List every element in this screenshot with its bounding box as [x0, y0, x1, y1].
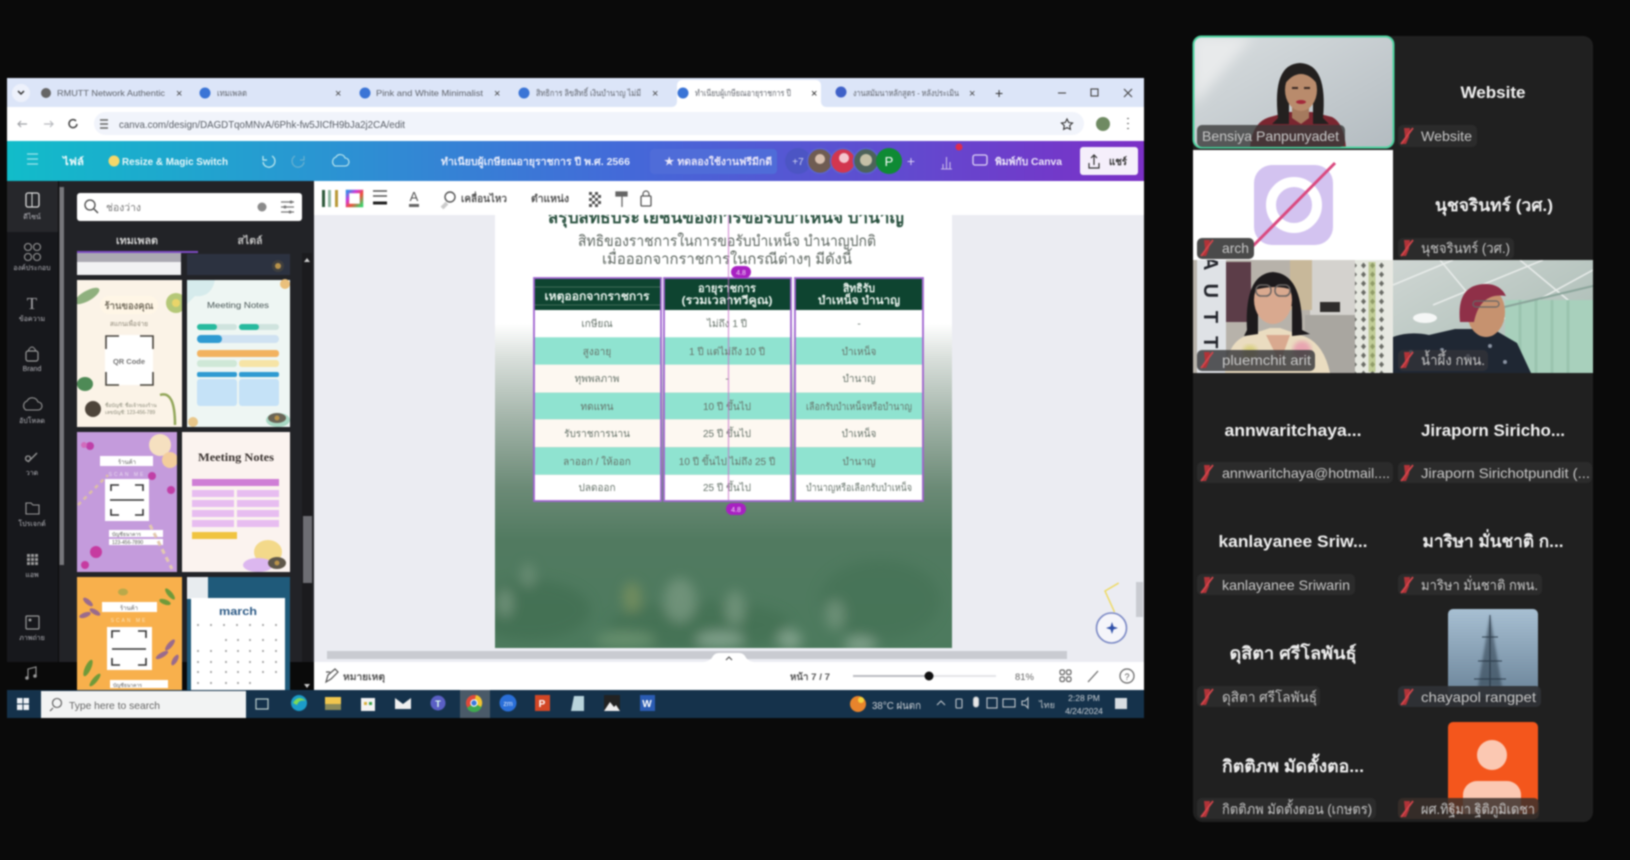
table column 3: เลือกรับบำเหน็จหรือบำนาญ: [806, 399, 912, 413]
trial button: ★ ทดลองใช้งานฟรีมีกดี: [664, 155, 772, 168]
template: QR code cream: ชื่อบัญชี: ชื่อเจ้าของร้าน: [105, 402, 157, 409]
table column 1: ทดแทน: [581, 402, 614, 413]
participant: arch: arch: [1222, 240, 1249, 256]
participant: กิตติภพ: กิตติภพ มัดตั้งตอน (เกษตร): [1222, 799, 1372, 817]
participant: น้ำผึ้ง กพน.: น้ำผึ้ง กพน.: [1421, 350, 1485, 368]
canva contextual toolbar: ตำแหน่ง: [531, 193, 569, 205]
canva icon rail: อัปโหลด: [19, 416, 45, 425]
spacing badge bottom: [726, 503, 746, 515]
template: meeting notes teal: Meeting Notes: [207, 301, 269, 310]
page heading: สรุปสิทธิประโยชน์ของการขอรับบำเหน็จ บำนาญ: [548, 205, 904, 228]
collaborators: +7: [792, 157, 804, 168]
canva contextual toolbar: เคลื่อนไหว: [461, 191, 507, 205]
table column 1: รับราชการนาน: [564, 429, 630, 440]
hair: [1272, 63, 1329, 124]
system tray: [937, 697, 1028, 708]
taskbar search: Type here to search: [69, 700, 160, 712]
table column 3: บำนาญ: [843, 457, 875, 468]
spacing badge top: 4.8: [736, 270, 746, 277]
windows taskbar: [7, 690, 1144, 718]
clock: 4/24/2024: [1065, 706, 1103, 716]
window controls: [1058, 89, 1132, 97]
taskbar weather: 38°C ฝนตก: [872, 701, 921, 712]
template: purple scan me: บัญชีธนาคาร: [112, 531, 141, 538]
template: purple scan me: [77, 432, 178, 572]
participant: kanlayanee: kanlayanee Sriwarin: [1222, 577, 1350, 593]
canva icon rail: Brand: [23, 366, 41, 373]
table column 2: 1 ปี แต่ไม่ถึง 10 ปี: [689, 346, 765, 358]
participant: นุชจรินทร์: นุชจรินทร์ (วศ.): [1421, 240, 1510, 257]
taskbar app icons: zm: [503, 701, 513, 708]
participant: ผศ.ทิฐิมา: ผศ.ทิฐิมา ฐิติภูมิเดชา: [1421, 801, 1535, 818]
spacing badge bottom: 4.8: [731, 507, 741, 514]
lattice: [1355, 260, 1393, 373]
participant: Website: Website: [1460, 83, 1526, 102]
template: QR code cream: เลขบัญชี: 123-456-789: [105, 409, 155, 416]
table column 1: [534, 278, 661, 501]
participant: arch: [1193, 150, 1393, 260]
table column 3: สิทธิรับ: [843, 282, 875, 295]
browser tab strip: สิทธิการ ลิขสิทธิ์ เงินบำนาญ ไม่มี: [536, 87, 641, 98]
address bar: [7, 107, 1144, 141]
canva bottom bar: หมายเหตุ: [343, 672, 385, 683]
canva contextual toolbar: A: [410, 189, 419, 204]
canvas area: [314, 215, 1144, 662]
table column 3: บำเหน็จ: [842, 344, 876, 358]
selection outlines: [534, 278, 923, 501]
active tab: ทำเนียบผู้เกษียณอายุราชการ ปี: [695, 88, 791, 99]
page subheading: สิทธิของราชการในการขอรับบำเหน็จ บำนาญปกติ: [578, 231, 876, 250]
participant: pluemchit arit: pluemchit arit: [1222, 352, 1311, 368]
browser tab strip: ×: [494, 88, 500, 100]
spacing badge top: [731, 266, 751, 278]
canva icon rail: ภาพถ่าย: [19, 635, 45, 642]
taskbar weather: [850, 696, 921, 712]
template: QR code cream: สแกนเพื่อจ่าย: [110, 319, 148, 328]
template: orange scan me: [77, 577, 182, 690]
participant: Jiraporn: Jiraporn Siricho...: [1421, 421, 1565, 440]
participant: Jiraporn: [1398, 421, 1592, 483]
participant: Website: [1398, 83, 1526, 147]
share button: [1080, 147, 1138, 175]
canva header bar: พิมพ์กับ Canva: [995, 156, 1062, 168]
canva page: [470, 205, 952, 653]
name tag: Bensiya Panpunyadet: [1202, 128, 1339, 144]
address bar: canva.com/design/DAGDTqoMNvA/6Phk-fw5JICfH9bJa2j2CA/edit: [119, 119, 405, 131]
table column 1: เกษียณ: [581, 318, 613, 330]
search box: ช่องว่าง: [106, 203, 141, 214]
template row 0: [77, 253, 290, 275]
trial button: [650, 149, 777, 174]
browser window: [7, 78, 1144, 718]
canva header bar: Resize & Magic Switch: [122, 156, 228, 168]
template: purple scan me: SCAN ME: [109, 472, 145, 478]
table column 1: เหตุออกจากราชการ: [544, 291, 650, 304]
participant: chayapol rangpet: [1398, 609, 1541, 707]
browser tab strip: ×: [176, 88, 182, 100]
canva icon rail: T: [27, 294, 38, 313]
template: orange scan me: ร้านค้า: [120, 605, 138, 612]
participant: Website: Website: [1421, 128, 1472, 144]
table column 2: ไม่ถึง 1 ปี: [706, 318, 747, 330]
page subheading: [578, 231, 876, 268]
search box: [77, 193, 302, 221]
participant: annwaritchaya: annwaritchaya...: [1224, 421, 1362, 440]
participant: นุชจรินทร์: นุชจรินทร์ (วศ.): [1435, 195, 1553, 216]
banner: AUTT: [1199, 256, 1221, 361]
taskbar search: [41, 691, 246, 718]
table column 3: บำนาญ: [843, 374, 875, 385]
table column 3: -: [857, 319, 861, 330]
browser tab strip: ×: [969, 88, 975, 100]
browser tab strip: งานสมัมนาหลักสูตร - หลังประเมิน: [853, 88, 959, 99]
page subheading: เมื่อออกจากราชการในกรณีต่างๆ มีดังนี้: [602, 248, 852, 268]
participant: Jiraporn: Jiraporn Sirichotpundit (...: [1421, 465, 1590, 481]
participant: chayapol rangpet: chayapol rangpet: [1421, 689, 1536, 705]
canva bottom bar: 81%: [1015, 672, 1035, 683]
participant: ดุสิตา: [1197, 643, 1356, 707]
avatar: orange user: [1448, 722, 1538, 821]
person: [1225, 272, 1330, 373]
panel collapse handle: [313, 407, 322, 463]
template: orange scan me: SCAN ME: [111, 618, 147, 624]
active tab: ×: [811, 88, 817, 100]
alignment guide: [728, 215, 730, 500]
collaborators: [785, 148, 915, 174]
table column 1: ทุพพลภาพ: [575, 374, 619, 385]
canva icon rail: วาด: [26, 470, 38, 477]
participant: annwaritchaya: annwaritchaya@hotmail....: [1222, 465, 1390, 481]
collaborators: P: [885, 154, 893, 169]
assistant button: [1096, 613, 1126, 643]
table column 2: 25 ปี ขึ้นไป: [703, 480, 751, 494]
template: purple scan me: 123-456-7890: [112, 540, 143, 546]
taskbar app icons: P: [539, 699, 546, 710]
table column 3: บำเหน็จ บำนาญ: [818, 293, 900, 307]
participant: น้ำผึ้ง กพน.: [1393, 260, 1593, 373]
panel tabs: เทมเพลต: [116, 236, 158, 247]
canva icon rail: [7, 181, 65, 680]
participant: annwaritchaya: [1197, 421, 1393, 483]
browser tab strip: Pink and White Minimalist: [376, 88, 484, 98]
table column 3: บำนาญหรือเลือกรับบำเหน็จ: [806, 480, 912, 494]
panel tabs: [77, 234, 262, 253]
canva header bar: ทำเนียบผู้เกษียณอายุราชการ ปี พ.ศ. 2566: [441, 156, 630, 169]
yellow scribble annotation: [1105, 583, 1119, 612]
taskbar app icons: T: [435, 699, 441, 709]
table column 1: สูงอายุ: [583, 347, 611, 358]
participant: kanlayanee: [1197, 532, 1368, 595]
table column 2: 10 ปี ขึ้นไป ไม่ถึง 25 ปี: [679, 454, 775, 468]
input language: ไทย: [1038, 700, 1055, 710]
participant: มาริษา: มาริษา มั่นชาติ กพน.: [1421, 576, 1538, 593]
benefits table: [534, 278, 923, 501]
participant: Bensiya Panpunyadet: [1193, 36, 1394, 148]
clock: [1065, 693, 1103, 716]
table column 3: [795, 278, 922, 501]
table column 2: -: [725, 374, 729, 385]
collaborators: +: [907, 153, 915, 169]
table column 2: [664, 278, 791, 501]
template: meeting notes purple: [182, 432, 290, 572]
avatar: tower: [1448, 609, 1538, 697]
table column 2: 10 ปี ขึ้นไป: [703, 399, 751, 413]
template: QR code cream: [72, 280, 186, 427]
participant: กิตติภพ: กิตติภพ มัดตั้งตอ...: [1222, 753, 1364, 776]
table column 1: ปลดออก: [578, 483, 616, 494]
canva icon rail: ข้อความ: [19, 315, 45, 323]
start button: [17, 698, 29, 710]
canva header bar: [7, 141, 1144, 181]
canva icon rail: องค์ประกอบ: [13, 264, 51, 272]
participant: มาริษา: [1398, 529, 1564, 595]
template: march calendar: march: [219, 606, 257, 618]
banner: [1197, 256, 1226, 373]
share button: แชร์: [1109, 156, 1128, 168]
clock: 2:28 PM: [1068, 693, 1100, 703]
name tag: [1197, 125, 1345, 147]
canvas scrollbars: [327, 582, 1143, 662]
participant: kanlayanee: kanlayanee Sriw...: [1218, 532, 1368, 551]
participant: ดุสิตา: ดุสิตา ศรีโลพันธุ์: [1230, 643, 1356, 664]
template: meeting notes teal: [187, 279, 290, 427]
participant: กิตติภพ: [1197, 753, 1376, 819]
canva contextual toolbar: [314, 181, 1144, 215]
canva bottom bar: หน้า 7 / 7: [790, 671, 830, 683]
participant: นุชจรินทร์: [1398, 195, 1553, 259]
taskbar app icons: [291, 690, 655, 718]
template: march calendar: [187, 577, 290, 690]
table column 1: ลาออก / ให้ออก: [563, 456, 631, 468]
table column 2: อายุราชการ: [698, 283, 756, 296]
browser tab strip: ×: [335, 88, 341, 100]
template: orange scan me: บัญชีธนาคาร: [113, 682, 142, 689]
blurred flower field: [496, 564, 880, 648]
table column 2: 25 ปี ขึ้นไป: [703, 426, 751, 440]
template panel: [65, 181, 314, 690]
browser tab strip: RMUTT Network Authentic: [57, 88, 166, 98]
browser tab strip: +: [995, 85, 1003, 101]
participant: pluemchit arit: [1193, 256, 1393, 373]
participant: ผศ.ทิฐิมา: [1398, 722, 1539, 821]
shirt: [1250, 112, 1346, 148]
canva header bar: ไฟล์: [62, 155, 84, 168]
canva bottom bar: ?: [1124, 672, 1130, 682]
participant: มาริษา: มาริษา มั่นชาติ ก...: [1422, 529, 1564, 551]
template: meeting notes purple: Meeting Notes: [198, 450, 274, 464]
browser tab strip: [7, 78, 1144, 107]
zoom participants panel: [1193, 36, 1593, 822]
table column 3: บำเหน็จ: [842, 426, 876, 440]
panel scrollbar: [302, 253, 312, 688]
participant: ดุสิตา: ดุสิตา ศรีโลพันธุ์: [1222, 689, 1317, 706]
canva bottom bar: [314, 662, 1144, 690]
panel tabs: สไตล์: [238, 234, 262, 247]
canva icon rail: โปรเจกต์: [18, 519, 46, 528]
template: purple scan me: ร้านค้า: [118, 459, 136, 466]
template: QR code cream: QR Code: [113, 357, 145, 366]
table column 2: (รวมเวลาทวีคูณ): [682, 294, 773, 308]
template: QR code cream: ร้านของคุณ: [105, 300, 154, 312]
active tab: [671, 80, 827, 107]
taskbar app icons: W: [642, 699, 652, 710]
canva icon rail: ดีไซน์: [23, 212, 41, 221]
canva icon rail: แอพ: [25, 572, 39, 579]
browser tab strip: ×: [652, 88, 658, 100]
browser tab strip: เทมเพลต: [217, 88, 247, 98]
